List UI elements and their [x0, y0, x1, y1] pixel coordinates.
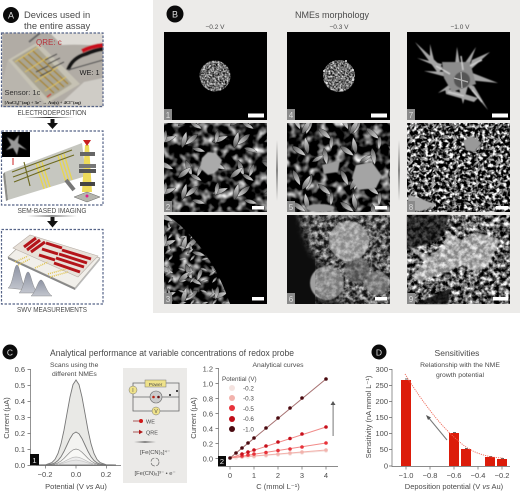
y tick labels: 150 [375, 413, 388, 422]
axes [389, 369, 510, 470]
x tick labels [38, 470, 111, 479]
x tick labels [228, 471, 328, 480]
SEM image 4: 4 [289, 111, 294, 120]
x tick labels [399, 471, 509, 480]
illustration: SWV measurements [8, 235, 100, 296]
electrochemical cell [150, 391, 162, 403]
SEM image 9: 9 [409, 295, 414, 304]
heading D: Sensitivities [435, 348, 479, 358]
SEM image 6 [287, 215, 390, 304]
illustration: SEM-based imaging [2, 132, 100, 202]
x tick labels: −1.0 [399, 471, 413, 480]
y tick labels: 0 [384, 462, 388, 470]
y tick labels: 100 [375, 429, 388, 438]
y tick labels: 0.2 [203, 440, 213, 448]
y tick labels: 0.4 [203, 424, 213, 434]
y axis title: Current (μA) [189, 397, 198, 439]
y tick labels: 0.8 [203, 394, 213, 404]
y tick labels: 0.0 [15, 461, 25, 470]
series -0.2 [230, 449, 328, 460]
column label -0.3 V: −0.3 V [330, 24, 349, 31]
x tick labels: 3 [300, 471, 304, 480]
badge C: C [7, 348, 13, 358]
reaction equation: [AuCl₄]⁻(aq) + 3e⁻ → Au(s) + 4Cl⁻(aq) [4, 100, 81, 105]
series -1.0 [228, 377, 328, 460]
divider between columns 1 and 2 [276, 140, 278, 201]
subtitle D: growth potential [436, 372, 484, 379]
badge A [3, 7, 19, 23]
annotation QRE: QRE: c [36, 38, 62, 47]
chart tag 2 [218, 456, 226, 466]
dashed frame 3 [2, 230, 103, 304]
SEM image 1: 1 [166, 111, 171, 120]
panel B background [153, 0, 520, 313]
heading A: the entire assay [24, 20, 90, 31]
x axis title: Deposition potential (V vs Au) [405, 482, 504, 491]
badge B [166, 6, 184, 22]
y tick labels: 250 [375, 381, 388, 390]
x tick labels: 1 [252, 471, 256, 480]
y tick labels: 0.2 [15, 429, 25, 438]
series -0.3 [230, 448, 328, 459]
y tick labels: 1.2 [203, 364, 213, 374]
power box: Power [149, 382, 163, 388]
SEM image 3 [164, 215, 267, 304]
chart tag 1: 1 [32, 456, 37, 465]
x axis title: Potential (V vs Au) [45, 482, 107, 491]
bar chart [364, 365, 510, 491]
error caps [405, 379, 504, 458]
legend: -0.6 [243, 416, 254, 423]
axes [216, 368, 338, 470]
y tick labels: 0.4 [15, 397, 25, 406]
chart subtitle: Scans using the [50, 362, 98, 369]
x tick labels: −0.2 [495, 471, 509, 480]
SEM image 4 [287, 32, 390, 120]
SEM image 6: 6 [289, 295, 294, 304]
label SEM imaging: SEM-BASED IMAGING [18, 208, 86, 215]
heading C: Analytical performance at variable concentrations of redox probe [50, 348, 294, 358]
SEM image 1 [164, 32, 267, 120]
panel A: devices and workflow [2, 7, 103, 314]
y tick labels: 0.1 [15, 445, 25, 454]
inset SEM image [2, 132, 30, 157]
badge A: A [8, 10, 14, 20]
y tick labels [15, 365, 25, 470]
x tick labels: 0.0 [71, 470, 81, 479]
dashed frame 2 [2, 131, 103, 205]
badge C [2, 344, 18, 360]
badge B: B [172, 10, 178, 20]
arrow down 2 [27, 216, 77, 228]
legend: -0.3 [243, 396, 254, 402]
SEM image 8 [407, 123, 510, 212]
y tick labels: 0.3 [15, 413, 25, 422]
fit curve [405, 374, 503, 458]
label electrodeposition: ELECTRODEPOSITION [18, 110, 86, 117]
y tick labels [375, 365, 388, 470]
series -0.5 [230, 441, 328, 458]
SEM image 5: 5 [289, 203, 294, 212]
SEM image 3: 3 [166, 295, 171, 304]
legend [222, 376, 257, 434]
legend: -0.2 [243, 386, 254, 392]
y tick labels: 50 [380, 445, 388, 454]
x tick labels: −0.4 [471, 471, 485, 480]
y tick labels: 300 [375, 365, 388, 374]
legend: -0.5 [243, 406, 254, 413]
y tick labels [203, 364, 213, 464]
y tick labels: 0.6 [15, 365, 25, 374]
redox couple [134, 449, 176, 477]
subtitle D: Relationship with the NME [420, 362, 500, 369]
legend: Potential (V) [222, 376, 257, 383]
legend: -1.0 [243, 426, 254, 434]
divider between columns 2 and 3 [398, 140, 400, 201]
x tick labels: −0.6 [447, 471, 461, 480]
bars [401, 380, 507, 466]
SEM image 7: 7 [409, 111, 414, 120]
peak curves [36, 380, 116, 465]
chart subtitle: different NMEs [52, 371, 97, 378]
photo: device for electrodeposition [2, 33, 103, 107]
x tick labels: −0.8 [423, 471, 437, 480]
y tick labels: 0.0 [203, 454, 213, 464]
panel D: sensitivities [364, 344, 510, 491]
SEM image 2 [164, 123, 267, 212]
trend arrow [426, 415, 447, 440]
panel C: analytical performance [2, 344, 338, 491]
SEM image 5 [287, 123, 390, 212]
y tick labels: 0.5 [15, 381, 25, 390]
voltmeter: V [154, 409, 158, 415]
annotation sensor: Sensor: 1c [4, 88, 41, 97]
chart: scans [2, 362, 121, 491]
column label -1.0 V: −1.0 V [451, 24, 470, 31]
panel B: NME morphology [164, 6, 510, 310]
y axis title: Sensitivity (nA mmol L⁻¹) [364, 375, 373, 458]
SEM image 8: 8 [409, 203, 414, 212]
trend arrow [330, 401, 336, 436]
badge D: D [376, 348, 382, 358]
x axis title: C (mmol L⁻¹) [256, 482, 300, 491]
label SWV: SWV MEASUREMENTS [17, 307, 87, 314]
SEM image 7 [407, 32, 510, 120]
redox couple: [Fe(CN)₆]⁴⁻ [140, 449, 170, 456]
chart tag 2: 2 [220, 457, 224, 466]
column label -0.2 V: −0.2 V [206, 24, 225, 31]
redox couple: [Fe(CN)₆]³⁻ • e⁻ [134, 471, 176, 477]
y axis title: Current (μA) [2, 397, 11, 439]
y tick labels: 1.0 [203, 380, 213, 388]
heading B: NMEs morphology [295, 10, 370, 20]
x tick labels: 4 [324, 471, 328, 480]
heading A: Devices used in [24, 9, 90, 20]
chart: analytical curves [189, 362, 338, 491]
x tick labels: 0 [228, 471, 232, 480]
current meter: I [132, 388, 134, 394]
legend WE: WE [146, 420, 155, 426]
annotation WE: WE: 1 [80, 68, 100, 77]
SEM image 2: 2 [166, 203, 171, 212]
y tick labels: 200 [375, 397, 388, 406]
chart subtitle: Analytical curves [252, 362, 304, 369]
y axis and ticks [28, 369, 121, 468]
series -0.6 [230, 425, 328, 458]
badge D [372, 344, 386, 360]
x tick labels: 2 [276, 471, 280, 480]
x tick labels: 0.2 [101, 470, 111, 479]
arrow down 1 [24, 117, 74, 129]
SEM image 9 [407, 215, 510, 304]
schematic: circuit and redox [123, 368, 187, 483]
dashed frame 1 [2, 33, 103, 106]
SWV peaks [8, 265, 52, 296]
y tick labels: 0.6 [203, 410, 213, 418]
x tick labels: −0.2 [38, 470, 52, 479]
legend QRE: QRE [146, 430, 158, 436]
